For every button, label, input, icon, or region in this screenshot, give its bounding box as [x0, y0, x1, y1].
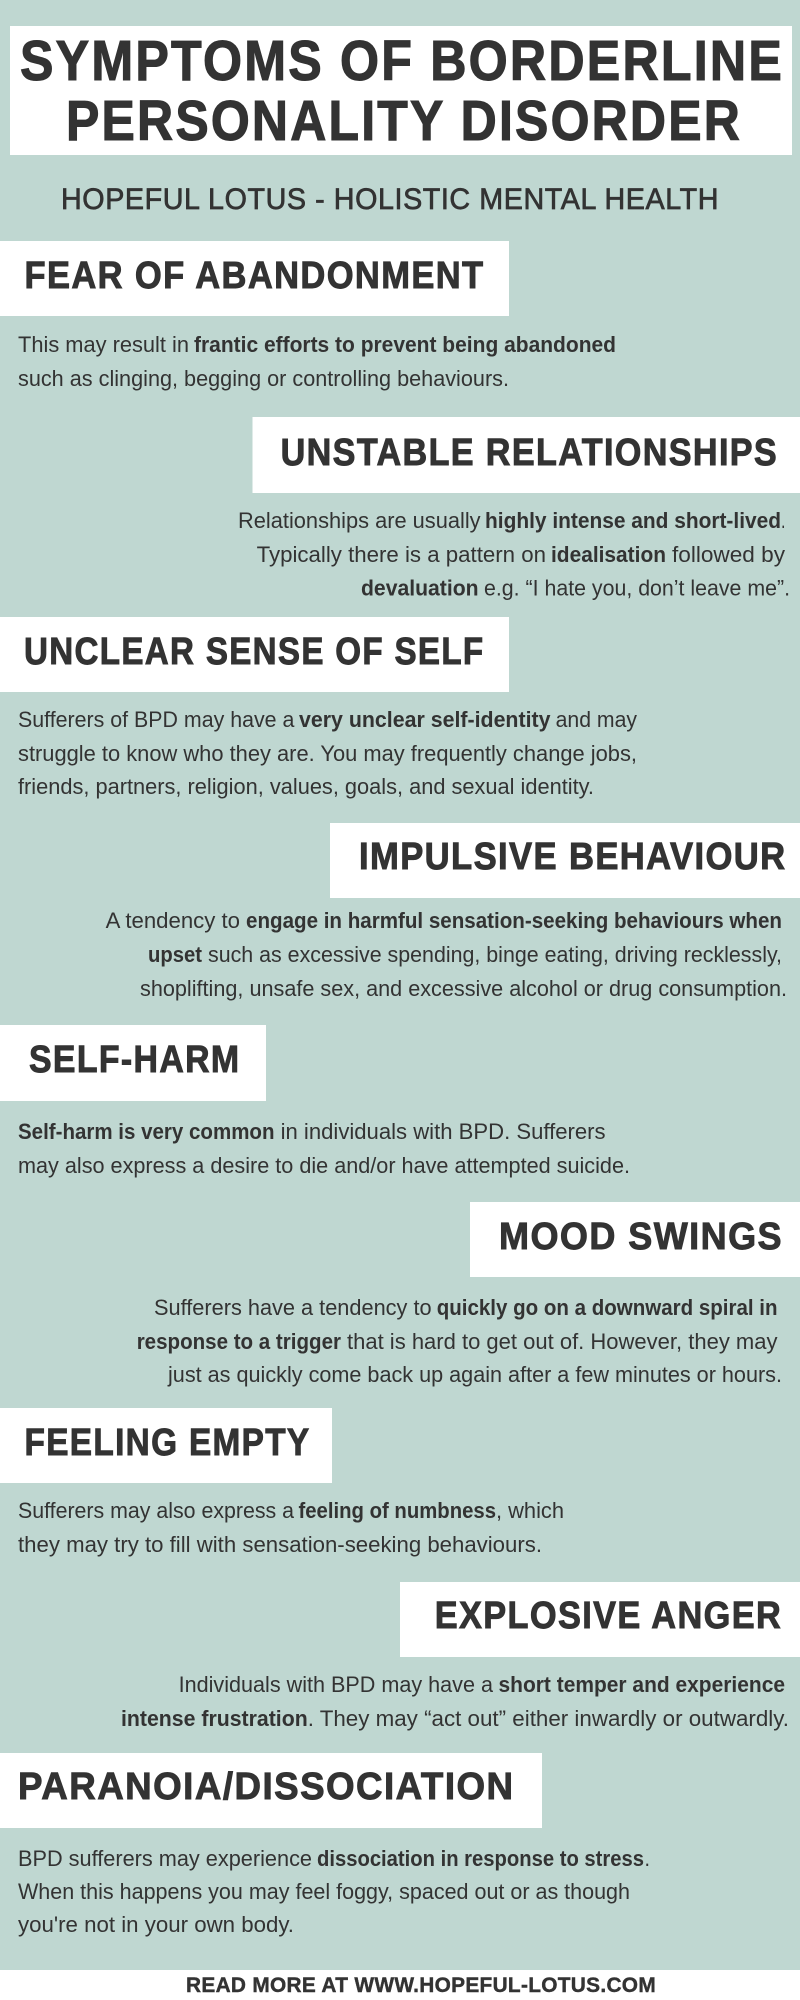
heading: FEELING EMPTY: [24, 1422, 310, 1464]
body text: you're not in your own body.: [18, 1912, 294, 1937]
panel: unclear sense of self: [0, 617, 638, 799]
body text: [18, 1498, 564, 1557]
panel: unstable relationships: [238, 417, 800, 600]
footer: READ MORE AT WWW.HOPEFUL-LOTUS.COM: [186, 1974, 656, 1997]
body text: feeling of numbness: [298, 1498, 496, 1523]
heading: SELF-HARM: [29, 1039, 240, 1081]
body text: devaluation: [361, 576, 479, 600]
body text: BPD sufferers may experience: [18, 1846, 312, 1871]
body text: Self-harm is very common: [18, 1119, 274, 1144]
subtitle: HOPEFUL LOTUS - HOLISTIC MENTAL HEALTH: [61, 183, 719, 216]
body text: upset: [148, 942, 202, 967]
body text: [121, 1672, 789, 1731]
body text: [106, 908, 787, 1001]
body text: Relationships are usually: [238, 508, 481, 533]
body text: [18, 332, 616, 391]
panel: title: [10, 26, 792, 155]
panel: fear of abandonment: [0, 241, 616, 391]
panel: paranoia/dissociation: [0, 1753, 650, 1937]
body text: Sufferers have a tendency to: [154, 1295, 432, 1320]
body text: in individuals with BPD. Sufferers: [281, 1119, 606, 1144]
heading: PARANOIA/DISSOCIATION: [18, 1766, 514, 1808]
body text: intense frustration: [121, 1706, 308, 1731]
body text: they may try to fill with sensation-seeking behaviours.: [18, 1532, 542, 1557]
body text: Sufferers may also express a: [18, 1498, 294, 1523]
body text: short temper and experience: [498, 1672, 785, 1697]
body text: very unclear self-identity: [299, 707, 551, 732]
body text: [18, 707, 638, 799]
body text: dissociation in response to stress: [317, 1846, 644, 1871]
body text: e.g. “I hate you, don’t leave me”.: [484, 576, 790, 600]
body text: response to a trigger: [137, 1329, 341, 1354]
body text: When this happens you may feel foggy, spaced out or as though: [18, 1879, 630, 1904]
panel: feeling empty: [0, 1408, 564, 1557]
footer: [0, 1970, 800, 2000]
panel: mood swings: [137, 1202, 800, 1387]
body text: A tendency to: [106, 908, 240, 933]
body text: struggle to know who they are. You may frequently change jobs,: [18, 741, 637, 766]
title: [20, 29, 784, 153]
body text: [18, 1119, 630, 1178]
body text: [238, 508, 790, 600]
body text: followed by: [672, 542, 786, 567]
body text: , which: [496, 1498, 564, 1523]
body text: idealisation: [551, 542, 666, 567]
body text: just as quickly come back up again after a few minutes or hours.: [167, 1362, 782, 1387]
heading: FEAR OF ABANDONMENT: [24, 255, 484, 297]
panel: impulsive behaviour: [106, 823, 800, 1001]
body text: frantic efforts to prevent being abandoned: [194, 332, 616, 357]
body text: Individuals with BPD may have a: [179, 1672, 493, 1697]
body text: quickly go on a downward spiral in: [437, 1295, 778, 1320]
body text: .: [644, 1846, 650, 1871]
body text: such as excessive spending, binge eating, driving recklessly,: [208, 942, 782, 967]
panel: self-harm: [0, 1025, 630, 1178]
body text: such as clinging, begging or controlling behaviours.: [18, 366, 509, 391]
body text: highly intense and short-lived: [485, 508, 781, 533]
body text: [18, 1846, 650, 1937]
body text: . They may “act out” either inwardly or outwardly.: [308, 1706, 789, 1731]
body text: shoplifting, unsafe sex, and excessive alcohol or drug consumption.: [140, 976, 787, 1001]
body text: [137, 1295, 782, 1387]
body text: may also express a desire to die and/or have attempted suicide.: [18, 1153, 630, 1178]
panel: explosive anger: [121, 1582, 800, 1731]
body text: This may result in: [18, 332, 189, 357]
body text: Sufferers of BPD may have a: [18, 707, 295, 732]
body text: Typically there is a pattern on: [257, 542, 546, 567]
body text: and may: [556, 707, 638, 732]
body text: that is hard to get out of. However, they may: [347, 1329, 778, 1354]
heading: UNCLEAR SENSE OF SELF: [24, 631, 484, 673]
body text: friends, partners, religion, values, goals, and sexual identity.: [18, 774, 594, 799]
heading: MOOD SWINGS: [499, 1216, 783, 1258]
body text: .: [781, 508, 786, 533]
